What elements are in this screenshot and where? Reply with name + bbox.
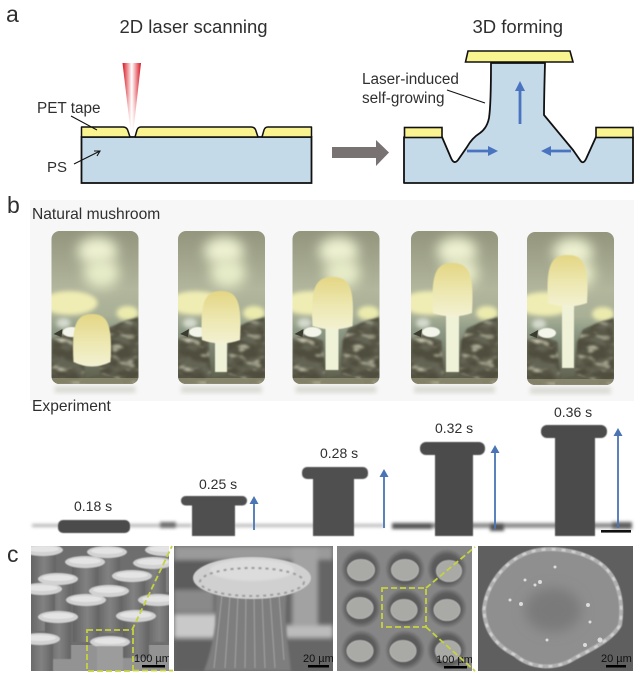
pillar: 0.36 s xyxy=(541,425,607,536)
scale bar xyxy=(601,530,631,533)
label: laser-induced self-growing: self-growing xyxy=(362,90,444,107)
arrow: process direction xyxy=(332,140,389,166)
time labels xyxy=(74,404,592,514)
heading: 3D forming: 3D forming xyxy=(472,16,563,37)
diagram: 3D forming structure xyxy=(404,51,633,183)
scale: 20 um: 20 µm xyxy=(601,653,632,665)
panel label b: b xyxy=(7,192,20,218)
heading: 2D laser scanning: 2D laser scanning xyxy=(120,16,268,37)
panel: experiment xyxy=(32,398,632,536)
photo: mushroom 3 xyxy=(282,231,380,393)
label: PS: PS xyxy=(47,159,67,176)
PS grown body xyxy=(404,63,633,183)
arrow: self-growing pointer xyxy=(447,90,485,103)
SEM: top view array xyxy=(337,546,473,671)
arrows: growth directions xyxy=(467,86,571,151)
panel label a: a xyxy=(6,1,19,27)
zoom indicator: top view xyxy=(382,547,475,671)
panel label c: c xyxy=(7,541,18,567)
SEM: pillar top close-up xyxy=(478,546,633,671)
pillar: 0.32 s xyxy=(420,442,485,536)
SEM: single pillar close-up xyxy=(174,546,334,671)
pillar: 0.18 s xyxy=(58,520,130,533)
label: PET tape: PET tape xyxy=(37,100,100,117)
scale: 100 um: 100 µm xyxy=(134,653,171,665)
zoom indicator: pillar xyxy=(87,546,173,671)
time labels: 0.28 s xyxy=(320,445,358,461)
SEM: tilted pillar array xyxy=(31,546,169,671)
arrow: PS pointer xyxy=(74,151,100,164)
time labels: 0.36 s xyxy=(554,404,592,420)
arrow: PET tape pointer xyxy=(71,116,97,130)
scale: 100 um: 100 µm xyxy=(436,654,473,666)
panel: natural mushroom xyxy=(30,200,634,401)
photo: mushroom 1 xyxy=(42,231,138,393)
photo: mushroom 2 xyxy=(168,231,265,393)
time labels: 0.25 s xyxy=(199,476,237,492)
heading: experiment: Experiment xyxy=(32,398,112,415)
substrate line xyxy=(32,522,632,531)
time labels: 0.18 s xyxy=(74,498,112,514)
scale: 20 um: 20 µm xyxy=(303,653,334,665)
PS layer xyxy=(82,137,312,183)
heading: natural mushroom: Natural mushroom xyxy=(32,206,160,223)
diagram: laser scanning substrate xyxy=(82,63,312,183)
arrows: growth height xyxy=(254,431,618,530)
photo: mushroom 5 xyxy=(517,232,614,394)
PET tape pieces xyxy=(404,51,633,138)
icon: laser beam xyxy=(122,63,141,135)
PET tape xyxy=(82,127,312,137)
photo: mushroom 4 xyxy=(401,231,498,393)
label: laser-induced self-growing: Laser-induced xyxy=(362,71,459,88)
time labels: 0.32 s xyxy=(435,420,473,436)
pillar: 0.25 s xyxy=(181,496,247,536)
pillar: 0.28 s xyxy=(302,467,368,536)
